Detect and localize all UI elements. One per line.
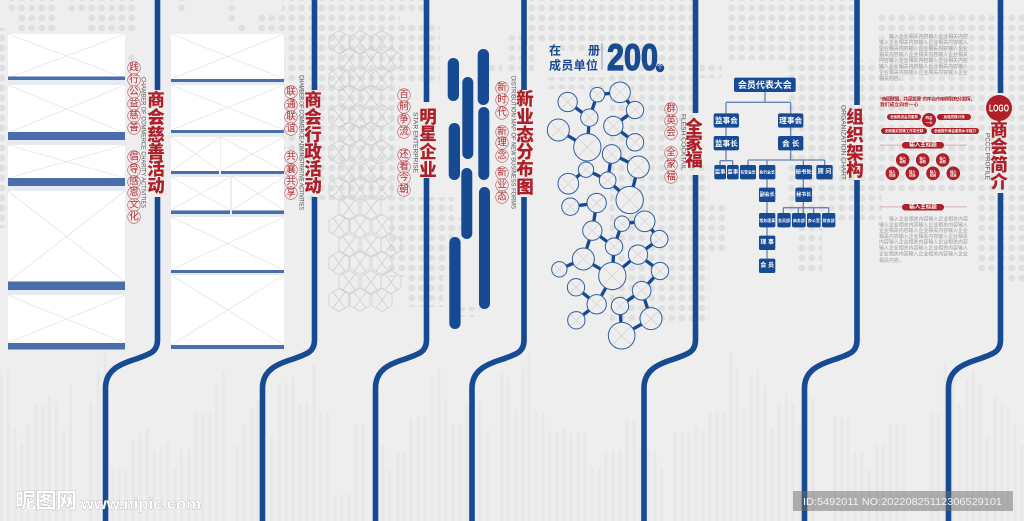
heading: organization chart: 组织架构 [846,107,864,180]
heading: administrative activities: CHAMBER OF COMMERCE ADMINISTRATIVE ACTIVITIES [298,75,304,210]
heading: family portrait: 全家福 [685,117,703,170]
organization chart [714,78,835,273]
blue timeline line 1 [106,0,158,521]
red circle labels: 标题 [889,172,896,177]
organization chart: 财务部 [823,217,835,223]
heading: family portrait [680,114,703,171]
heading: charity activities: CHAMBER OF COMMERCE CHARITY ACTIVITIES [140,77,146,208]
red circle labels: 标题 [920,159,927,164]
intro text block bottom: 输入企业相关内容输入企业相关内容输入 [879,221,968,228]
organization chart: 监事 [715,167,726,175]
heading: organization chart: ORGANIZATION CHART [840,105,846,180]
intro text block bottom: 相关内容。 [879,257,904,264]
red circle labels: 输入 [950,169,957,174]
watermark: site logo: www.nipic.com [80,496,201,513]
organization chart: 监事会 [715,115,738,125]
intro text block top: 内容输入企业相关内容输入企业相关内容 [879,57,968,64]
red pill diagram: 四会 [926,115,933,120]
logo badge: LOGO [989,104,1009,114]
logo badge [986,95,1012,121]
heading: organization chart [840,105,864,180]
subheading one [880,140,967,148]
member count headline: 成员单位 [549,58,598,72]
member count headline: 册 [588,44,600,58]
organization chart: 理 事 [760,238,774,246]
blue timeline line 2 [262,0,314,521]
red pill diagram: 全面落实党建工作责任制 [885,128,924,133]
organization chart: 秘书长 [796,191,811,198]
dotted world map pattern [0,0,1024,323]
red slogan text: "商圈联盟，共谋发展" 的平台作用得到充分发挥， [880,96,975,102]
organization chart: 监事 [727,167,739,175]
intro text block top: 企业相关内容输入企业相关内容输入企业 [879,69,968,76]
red pill diagram [881,113,979,134]
intro text block top: 输入企业相关内容输入企业相关内容 [889,33,968,40]
heading: administrative activities [298,75,322,210]
intro text block bottom: 内容输入企业相关内容输入企业相关内容 [879,239,968,246]
heading: charity activities: 商会慈善活动 [147,90,165,196]
blue timeline line 3 [376,0,426,521]
hexagon logo grid: star enterprise [329,30,401,312]
member count headline: 在 [549,42,561,58]
heading: star enterprise: 明星企业 [419,107,437,180]
red pill diagram: 一心 [926,120,933,124]
subheading two [880,202,967,210]
intro text block top: 企业相关内容输入企业相关内容输入企业 [879,45,968,52]
red circle labels: 输入 [909,169,916,174]
heading: chamber profile: 商会简介 [990,120,1008,192]
intro text block bottom: 输入企业相关内容输入企业相关内容输入 [879,245,968,252]
chart: blue pill columns [448,49,490,329]
organization chart: 常务理事 [759,217,775,223]
red slogan text [880,96,975,108]
red circle labels: 标题 [950,172,957,177]
slogan: charity activities: 践行公益慈善倡导感恩文化 [129,62,139,222]
member count headline: 个 [657,64,663,71]
blue timeline line 7 [948,0,1000,521]
heading: star enterprise [412,107,437,180]
organization chart: 理事会 [779,115,802,125]
red pill diagram: 全面推进会员服务 [890,114,918,119]
red circle labels: 输入 [920,156,927,160]
heading: chamber profile: PCCC PROFILE [984,133,990,180]
organization chart: 顾 问 [818,167,831,175]
watermark: image id: ID:5492011 NO:20220825112306529101 [803,496,1002,508]
red circle labels: 标题 [930,172,937,177]
subheading two: 输入主标题 [909,202,937,210]
intro text block bottom: 企业相关内容输入企业相关内容输入企业 [879,227,968,234]
organization chart: 会 长 [782,138,800,148]
red circle labels: 标题 [909,172,916,177]
organization chart: 监事长 [715,138,738,148]
blue timeline line 6 [804,0,857,521]
heading: star enterprise: STAR ENTERPRISE [412,112,418,173]
slogan: star enterprise: 百舸争流还看今朝 [399,90,409,196]
heading: new business forms: 新业态分布图 [516,89,534,197]
family photo bubble network [547,82,669,349]
organization chart: 副会长 [760,191,775,198]
heading: new business forms: DISTRIBUTION MAP OF NEW BUSINESS FORMS [510,76,516,209]
heading: new business forms [510,76,534,209]
red circle labels: 标题 [900,159,907,164]
organization chart: 会员部 [778,217,790,223]
red circle labels: 输入 [940,156,947,160]
intro text block bottom [879,215,968,264]
blue timeline line 5 [644,0,696,521]
red pill diagram: 加强党建引领 [944,114,965,119]
intro text block top: 输入企业相关内容输入企业相关内容输入 [879,63,968,70]
intro text block top [879,33,968,82]
red circle labels [886,153,960,180]
red circle labels: 输入 [889,169,896,174]
slogan: administrative activities: 联通联谊共襄共享 [286,86,296,198]
intro text block bottom: 相关内容输入企业相关内容输入企业相关 [879,233,968,240]
slogan: family portrait: 群英会全家福 [666,102,676,182]
organization chart: 办公室 [808,217,820,223]
watermark: image id [793,491,1013,511]
organization chart: 名誉会长 [740,169,756,174]
slogan: new business forms: 新时代新理念新业态 [497,82,507,202]
red slogan text: 我们成立四会一心 [880,101,919,108]
intro text block top: 相关内容。 [879,75,904,82]
red circle labels: 输入 [930,169,937,174]
heading: family portrait: FLESH COCKTAIL [680,114,686,171]
subheading one: 输入主标题 [909,140,937,148]
organization chart: 会员代表大会 [738,79,792,90]
panel: administrative activity photo placeholders [171,34,284,349]
intro text block bottom: 输入企业相关内容输入企业相关内容 [889,215,968,222]
member count headline [549,37,664,78]
intro text block top: 相关内容输入企业相关内容输入企业相关 [879,51,968,58]
red pill diagram: 全面提升商会服务水平能力 [934,128,976,133]
red circle labels: 输入 [900,156,907,160]
watermark: site logo [15,490,201,513]
blue timeline line 4 [472,0,524,521]
bottom bar-chart background pattern [2,351,1022,521]
red circle labels: 标题 [940,159,947,164]
organization chart: 秘书处 [796,167,812,175]
panel: charity activity photo placeholders [8,34,125,350]
watermark: site logo: 昵图网 [15,490,77,513]
organization chart: 会 员 [760,261,774,269]
member count headline: 200 [607,37,658,78]
heading: administrative activities: 商会行政活动 [304,90,322,196]
organization chart: 商务部 [793,217,805,223]
intro text block bottom: 企业相关内容输入企业相关内容输入企业 [879,251,968,258]
heading: charity activities [140,77,165,208]
organization chart: 执行会长 [760,169,775,174]
intro text block top: 输入企业相关内容输入企业相关内容输入 [879,39,968,46]
